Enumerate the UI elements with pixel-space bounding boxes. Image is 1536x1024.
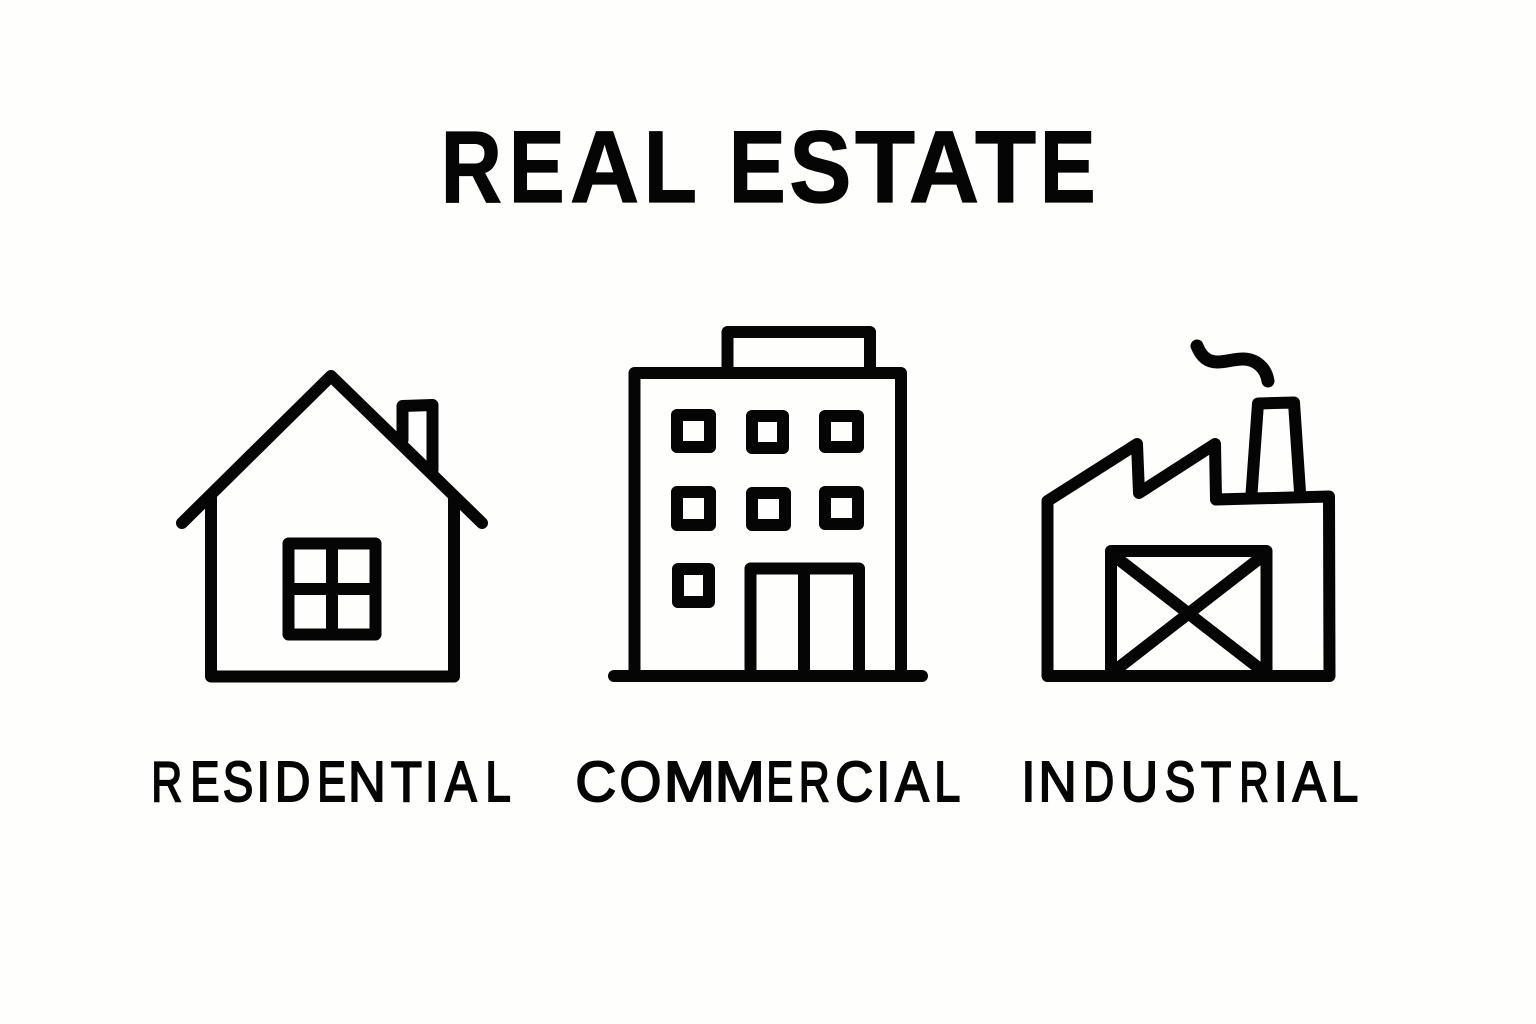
label: industrial: U bbox=[1121, 750, 1158, 814]
label: industrial: N bbox=[1038, 750, 1077, 814]
title: E bbox=[1040, 110, 1096, 224]
title: S bbox=[789, 110, 852, 224]
label: residential: R bbox=[151, 750, 182, 814]
label: residential: I bbox=[425, 750, 439, 814]
title: E bbox=[509, 110, 565, 224]
label: commercial: L bbox=[934, 750, 960, 814]
label: industrial: L bbox=[1331, 750, 1358, 814]
title: R bbox=[441, 110, 502, 224]
label: residential: I bbox=[256, 750, 270, 814]
title: T bbox=[855, 110, 915, 224]
label: commercial: M bbox=[664, 750, 715, 814]
label: industrial: T bbox=[1201, 750, 1231, 814]
title: A bbox=[570, 110, 639, 224]
label: commercial: I bbox=[876, 750, 890, 814]
label: industrial: D bbox=[1083, 750, 1114, 814]
label: commercial: C bbox=[575, 750, 616, 814]
icon: factory bbox=[1048, 346, 1330, 676]
label: residential: A bbox=[445, 750, 477, 814]
label: residential: S bbox=[223, 750, 253, 814]
icon: house bbox=[182, 376, 482, 676]
icon: office building bbox=[614, 332, 922, 676]
label: commercial: M bbox=[715, 750, 765, 814]
label: commercial: A bbox=[895, 750, 929, 814]
label: commercial: R bbox=[799, 750, 830, 814]
label: industrial: S bbox=[1165, 750, 1195, 814]
label: residential: N bbox=[348, 750, 386, 814]
label: residential: E bbox=[190, 750, 220, 814]
label: industrial: R bbox=[1239, 750, 1269, 814]
label: commercial: E bbox=[766, 750, 793, 814]
label: commercial: C bbox=[835, 750, 873, 814]
title: E bbox=[729, 110, 786, 224]
label: commercial: O bbox=[620, 750, 661, 814]
label: residential: D bbox=[275, 750, 310, 814]
title: T bbox=[975, 110, 1036, 224]
label: residential: T bbox=[391, 750, 422, 814]
label: residential: L bbox=[485, 750, 511, 814]
label: industrial: I bbox=[1021, 750, 1035, 814]
label: industrial: A bbox=[1293, 750, 1326, 814]
title: A bbox=[909, 110, 979, 224]
label: industrial: I bbox=[1274, 750, 1288, 814]
title: L bbox=[644, 110, 696, 224]
label: residential: E bbox=[317, 750, 346, 814]
